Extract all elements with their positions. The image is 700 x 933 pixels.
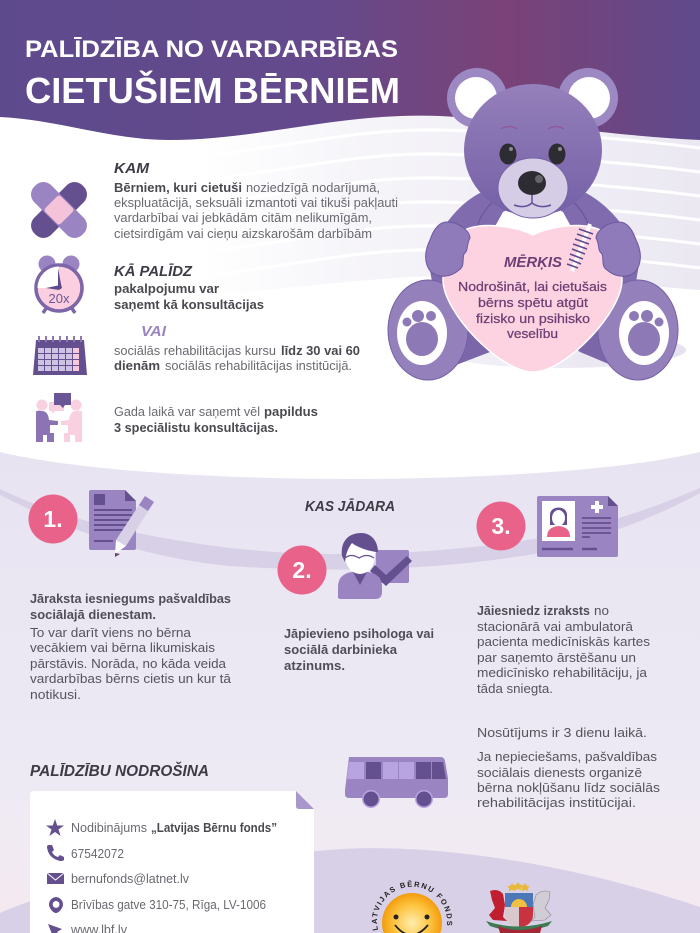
header banner xyxy=(0,0,700,140)
step 3 text xyxy=(477,604,650,696)
bear nose and mouth xyxy=(514,171,551,207)
step 2 text: sociālā darbinieka xyxy=(284,643,398,657)
text: additional consultations xyxy=(114,405,318,435)
section: KAM: noziedzīgā nodarījumā, xyxy=(246,181,380,195)
text: rehabilitation course: sociālās rehabilitācijas institūcijā. xyxy=(165,359,352,373)
icon: people talking xyxy=(36,393,82,442)
icon: envelope xyxy=(47,873,64,884)
step 3 text: no xyxy=(594,604,609,618)
section: KAM: KAM xyxy=(114,160,150,177)
organisation name: „Latvijas Bērnu fonds” xyxy=(151,821,277,835)
step 1 text: notikusi. xyxy=(30,688,81,702)
section: KAM: Bērniem, kuri cietuši xyxy=(114,181,242,195)
icon: medical card xyxy=(537,496,618,557)
bear body xyxy=(428,188,640,330)
step 1 badge: 1. xyxy=(43,506,63,532)
contact card xyxy=(30,791,314,933)
goal text: fizisko un psihisko xyxy=(476,311,590,326)
goal text: bērns spētu atgūt xyxy=(478,295,588,310)
icon: bandage xyxy=(26,177,92,243)
bear eyes xyxy=(500,144,566,164)
step 3 badge xyxy=(476,502,526,550)
VAI label: VAI xyxy=(141,323,167,340)
bear right leg xyxy=(565,285,635,375)
step 3 text: pacienta medicīniskās kartes xyxy=(477,635,650,649)
referral text: Ja nepieciešams, pašvaldības xyxy=(477,750,657,764)
goal text: veselību xyxy=(507,326,558,341)
organisation name xyxy=(71,821,277,835)
bear chest xyxy=(492,207,574,245)
icon: location pin xyxy=(49,897,63,913)
icon: psychologist with check xyxy=(338,533,412,599)
text: additional consultations: 3 speciālistu konsultācijas. xyxy=(114,421,278,435)
logo: Latvijas Bērnu fonds: LATVIJAS BĒRNU FONDS xyxy=(372,880,452,930)
referral text: bērna nokļūšanu līdz sociālās xyxy=(477,781,660,795)
email: bernufonds@latnet.lv xyxy=(71,872,190,886)
section: KĀ PALĪDZ: KĀ PALĪDZ xyxy=(114,263,193,280)
text: additional consultations: papildus xyxy=(264,405,318,419)
bear left foot xyxy=(388,280,468,380)
address: Brīvības gatve 310-75, Rīga, LV-1006 xyxy=(71,898,266,912)
text: rehabilitation course: sociālās rehabilitācijas kursu xyxy=(114,344,276,358)
icon: document and pencil xyxy=(89,490,154,557)
step 1 text: pārstāvis. Norāda, no kāda veida xyxy=(30,657,226,671)
section: KAM: cietsirdīgām vai cieņu aizskarošām darbībām xyxy=(114,227,372,241)
step 3 text: Jāiesniedz izraksts xyxy=(477,604,590,618)
goal text: Nodrošināt, lai cietušais xyxy=(458,279,608,294)
bottom hill xyxy=(0,848,700,933)
step 2 text: atzinums. xyxy=(284,659,345,673)
step 2 badge: 2. xyxy=(292,557,312,583)
step 1 text: vecākiem vai bērna likumiskais xyxy=(30,641,215,655)
title: CIETUŠIEM BĒRNIEM xyxy=(25,69,400,111)
step 1 badge xyxy=(28,494,78,544)
title: PALĪDZĪBA NO VARDARBĪBAS xyxy=(25,36,398,63)
referral text: sociālais dienests organizē xyxy=(477,766,642,780)
bear left paw xyxy=(426,222,470,276)
card corner fold xyxy=(296,791,314,809)
bear shadow xyxy=(434,332,686,368)
section: KĀ PALĪDZ: saņemt kā konsultācijas xyxy=(114,298,264,312)
step 1 text: Jāraksta iesniegums pašvaldības xyxy=(30,592,231,606)
step 1 text: vardarbības bērns cietis un kur tā xyxy=(30,672,231,686)
logo: coat of arms of Latvia xyxy=(486,882,552,933)
step 2 text xyxy=(284,627,434,673)
heading: KAS JĀDARA: KAS JĀDARA xyxy=(305,498,395,515)
icon: star xyxy=(46,819,64,836)
section: KĀ PALĪDZ: pakalpojumu var xyxy=(114,282,219,296)
referral text: rehabilitācijas institūcijai. xyxy=(477,796,636,810)
title xyxy=(25,36,400,111)
bear arm creases xyxy=(476,198,590,232)
lower lavender section xyxy=(0,452,700,933)
section: KAM: ekspluatācijā, seksuāli izmantoti vai tikuši pakļauti xyxy=(114,196,398,210)
step 3 text: par saņemto ārstēšanu un xyxy=(477,651,636,665)
bear right paw xyxy=(596,222,640,276)
referral text: Nosūtījums ir 3 dienu laikā. xyxy=(477,726,647,740)
organisation name: Nodibinājums xyxy=(71,821,147,835)
heading: PALĪDZĪBU NODROŠINA: PALĪDZĪBU NODROŠINA xyxy=(30,761,209,780)
bear right foot xyxy=(598,280,678,380)
wavy background band xyxy=(322,116,700,290)
text: additional consultations: Gada laikā var saņemt vēl xyxy=(114,405,260,419)
bear eyebrows xyxy=(501,126,564,129)
step 3 text: stacionārā vai ambulatorā xyxy=(477,620,633,634)
section: KĀ PALĪDZ xyxy=(114,263,264,312)
bear ears xyxy=(447,68,618,128)
section: KAM: vardarbībai vai jebkādām citām nelikumīgām, xyxy=(114,211,372,225)
step 1 text xyxy=(30,592,231,702)
heart stitches xyxy=(567,224,593,271)
icon: phone xyxy=(47,845,64,861)
phone number: 67542072 xyxy=(71,847,124,861)
step 2 text: Jāpievieno psihologa vai xyxy=(284,627,434,641)
bear head xyxy=(464,84,602,216)
bear left leg xyxy=(430,285,500,375)
heart xyxy=(443,226,622,372)
bear muzzle xyxy=(498,158,568,218)
goal text xyxy=(458,279,608,341)
icon: cursor xyxy=(48,924,62,933)
step 3 text: tāda sniegta. xyxy=(477,682,553,696)
icon: bus xyxy=(345,757,448,808)
text: rehabilitation course xyxy=(114,344,360,373)
icon: clock 20x: 20x xyxy=(49,291,70,306)
icon: calendar xyxy=(33,336,87,375)
teddy bear with heart xyxy=(388,68,686,380)
step 1 text: sociālajā dienestam. xyxy=(30,608,156,622)
timeline ribbon xyxy=(0,488,700,570)
goal heading: MĒRĶIS xyxy=(504,254,562,271)
text: rehabilitation course: līdz 30 vai 60 xyxy=(281,344,360,358)
step 1 text: To var darīt viens no bērna xyxy=(30,626,191,640)
step 2 badge xyxy=(278,546,326,594)
text: rehabilitation course: dienām xyxy=(114,359,160,373)
icon: clock 20x xyxy=(36,256,82,313)
step 3 text: medicīnisko rehabilitāciju, ja xyxy=(477,666,647,680)
step 3 badge: 3. xyxy=(491,513,511,539)
section: KAM xyxy=(114,160,398,241)
referral text xyxy=(477,726,660,810)
